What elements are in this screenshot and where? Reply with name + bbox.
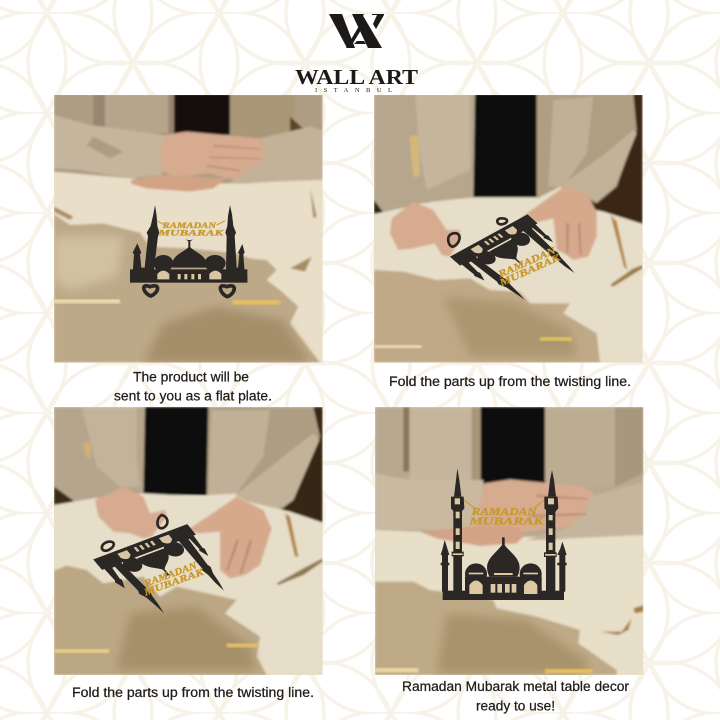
reflections — [375, 668, 418, 672]
caption: step 3: Fold the parts up from the twisting line. — [72, 685, 314, 700]
panel: step 1 photo — [54, 94, 323, 363]
reflections — [54, 299, 120, 303]
reflections — [54, 649, 109, 653]
gold Ramadan Mubarak sign: RAMADAN — [161, 221, 217, 230]
shirt — [590, 95, 643, 226]
icon: unfolded mosque plate — [93, 524, 224, 613]
gold Ramadan Mubarak sign: MUBARAK — [497, 252, 564, 290]
gold Ramadan Mubarak sign — [469, 508, 544, 525]
brand name: WALL ART — [295, 65, 418, 89]
gold Ramadan Mubarak sign: RAMADAN — [470, 507, 537, 518]
reflections — [374, 345, 422, 348]
gold chain — [462, 498, 547, 508]
icon: unfolded mosque plate — [450, 214, 574, 300]
table marble — [375, 530, 643, 675]
caption: step 2: Fold the parts up from the twisting line. — [389, 374, 631, 389]
hands — [95, 487, 167, 538]
gold Ramadan Mubarak sign: MUBARAK — [468, 517, 545, 528]
logo — [295, 14, 418, 94]
shirt — [375, 407, 643, 537]
caption: step 4: Ramadan Mubarak metal table decor — [402, 679, 630, 694]
gold Ramadan Mubarak sign — [144, 561, 204, 596]
shirt — [280, 407, 323, 524]
gold Ramadan Mubarak sign: RAMADAN — [142, 560, 199, 590]
gold Ramadan Mubarak sign — [498, 246, 561, 287]
gold Ramadan Mubarak sign: RAMADAN — [496, 245, 559, 281]
shirt — [54, 94, 323, 183]
table marble — [54, 170, 322, 272]
hands — [160, 132, 267, 178]
table marble — [374, 197, 643, 363]
panel: step 4 photo — [375, 407, 643, 675]
icon: flat mosque plate — [130, 205, 247, 283]
hands — [478, 479, 594, 532]
gold Ramadan Mubarak sign: MUBARAK — [157, 228, 226, 237]
caption: step 1: The product will be — [133, 370, 249, 384]
gold Ramadan Mubarak sign — [158, 222, 224, 236]
hands — [390, 202, 460, 257]
caption: step 1: sent to you as a flat plate. — [114, 388, 272, 404]
brand subtitle: ISTANBUL — [315, 87, 392, 94]
icon: WM monogram — [329, 14, 384, 48]
icon: assembled mosque — [441, 468, 567, 600]
caption: step 4: ready to use! — [476, 698, 555, 714]
gold Ramadan Mubarak sign: MUBARAK — [142, 566, 207, 599]
table marble — [54, 491, 323, 586]
panel: step 3 photo — [54, 407, 323, 675]
panel: step 2 photo — [374, 94, 643, 363]
